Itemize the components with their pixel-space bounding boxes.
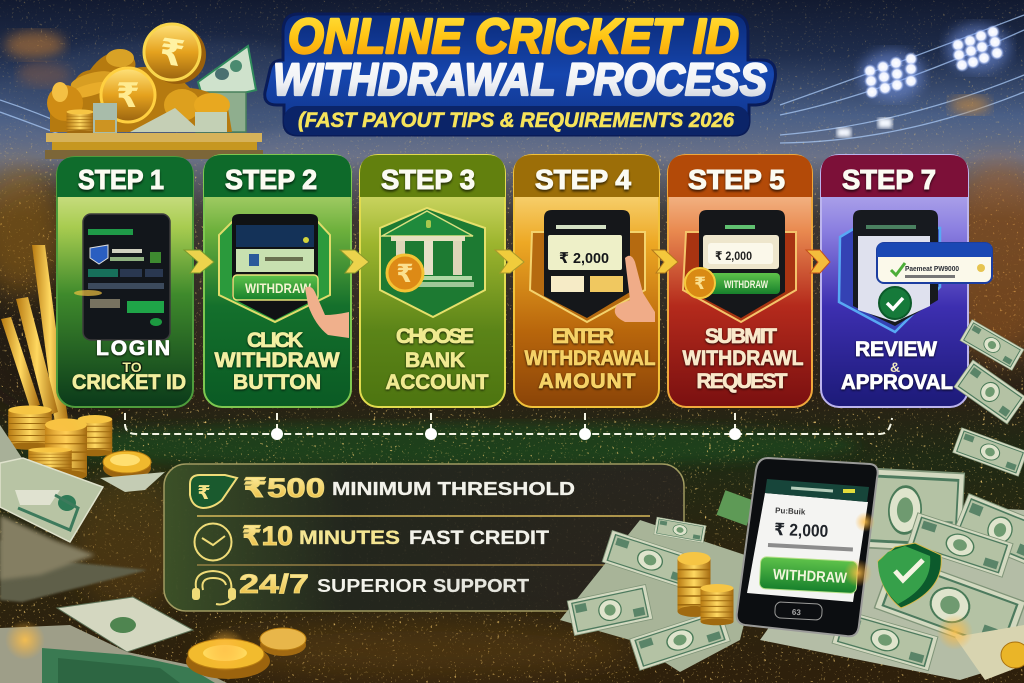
step 1 label: STEP 1 bbox=[78, 164, 164, 195]
row: fast credit: ₹10 bbox=[242, 521, 293, 551]
title line 2: WITHDRAWAL PROCESS bbox=[273, 54, 767, 105]
phone amount: ₹ 2,000 bbox=[774, 520, 828, 541]
step 2 hexagon with phone bbox=[219, 214, 330, 322]
row: superior support: SUPPORT bbox=[433, 576, 529, 596]
step 1 phone bbox=[74, 214, 170, 340]
step 4 caption bbox=[524, 325, 656, 393]
approval popup bbox=[877, 243, 992, 283]
row: superior support: 24/7 bbox=[239, 569, 309, 599]
step 1 caption: TO bbox=[122, 359, 142, 375]
step 4 hexagon with phone: ₹ 2,000 bbox=[559, 250, 609, 267]
phone withdraw button: WITHDRAW bbox=[773, 566, 848, 587]
step 5 hexagon with phone bbox=[683, 210, 796, 322]
step 7 caption: & bbox=[890, 359, 900, 375]
step 5 caption: WITHDRAWL bbox=[682, 347, 804, 370]
panel: key benefits bbox=[164, 464, 684, 611]
step 7 label: STEP 7 bbox=[842, 164, 936, 195]
row: minimum threshold: ₹500 bbox=[243, 473, 325, 503]
step 3 label: STEP 3 bbox=[381, 164, 475, 195]
title banner bbox=[265, 10, 775, 135]
panel: step 5 bbox=[668, 155, 812, 407]
row: superior support: SUPERIOR bbox=[317, 576, 427, 596]
cash pile: bottom right bbox=[560, 320, 1024, 680]
panel: step 2 bbox=[204, 155, 351, 407]
step 5 caption: REQUEST bbox=[696, 370, 788, 393]
icon: green security shield bbox=[878, 543, 941, 608]
step 5 hexagon with phone: ₹ 2,000 bbox=[715, 249, 752, 263]
step 7 caption: REVIEW bbox=[855, 338, 937, 361]
icon: golden cricket stumps bbox=[1, 245, 68, 424]
step 2 caption bbox=[214, 329, 340, 394]
panel: step 4 bbox=[514, 155, 659, 407]
arrow: step 5 to 7 bbox=[806, 250, 830, 273]
panel: step 1 bbox=[57, 157, 193, 407]
step 7 caption: APPROVAL bbox=[841, 371, 953, 394]
icon: rupee shield tick bbox=[190, 475, 237, 508]
icon: treasure pile of rupee coins and cash: ₹ bbox=[157, 30, 187, 75]
panel: step 7 bbox=[821, 155, 992, 407]
icon: coin stacks beside stumps bbox=[8, 406, 151, 480]
step 7 caption bbox=[841, 338, 953, 394]
step 5 caption bbox=[682, 325, 804, 393]
cash pile: bottom left bbox=[0, 425, 227, 683]
step 2 label: STEP 2 bbox=[225, 164, 317, 195]
approval popup: Paemeat PW9000 bbox=[905, 266, 959, 273]
step 1 caption: CRICKET ID bbox=[72, 371, 186, 394]
icon: pointing finger bbox=[615, 256, 655, 322]
row: fast credit: FAST CREDIT bbox=[409, 528, 549, 549]
icon: treasure pile of rupee coins and cash: ₹ bbox=[116, 77, 140, 115]
row: fast credit bbox=[242, 521, 549, 551]
phone: withdraw mockup bbox=[737, 458, 878, 636]
step 1 caption bbox=[72, 337, 186, 394]
panel: step 3 bbox=[360, 155, 505, 407]
step 3 caption: CHOOSE bbox=[396, 325, 474, 348]
phone withdraw button bbox=[759, 557, 858, 594]
step 5 label: STEP 5 bbox=[688, 164, 785, 195]
icon: bank with rupee coin bbox=[380, 208, 485, 317]
phone home pill: 63 bbox=[792, 608, 802, 617]
phone home pill bbox=[775, 602, 822, 620]
row: fast credit: MINUTES bbox=[299, 528, 400, 549]
step 4 caption: ENTER bbox=[552, 325, 614, 348]
phone heading text: Pu:Buik bbox=[775, 506, 806, 517]
icon: treasure pile of rupee coins and cash bbox=[45, 24, 263, 159]
subtitle: (FAST PAYOUT TIPS & REQUIREMENTS 2026 bbox=[298, 109, 734, 132]
icon: gold coins bottom bbox=[186, 628, 306, 679]
row: minimum threshold: MINIMUM THRESHOLD bbox=[332, 479, 575, 499]
icon: headset bbox=[193, 571, 235, 604]
arrow: step 2 to 3 bbox=[340, 250, 369, 273]
timeline: dashed connector with nodes bbox=[125, 413, 892, 440]
icon: pointing hand bbox=[305, 287, 349, 338]
step 2 caption: CLICK bbox=[247, 329, 303, 352]
step 7 hexagon with phone bbox=[839, 210, 940, 332]
icon: green check badge bbox=[879, 287, 911, 319]
step 2 caption: WITHDRAW bbox=[214, 349, 340, 372]
step 2 withdraw button bbox=[233, 275, 318, 300]
step 4 hexagon with phone bbox=[530, 210, 645, 322]
step 3 caption: BANK bbox=[405, 349, 465, 372]
step 2 caption: BUTTON bbox=[233, 371, 321, 394]
arrow: step 1 to 2 bbox=[184, 250, 214, 273]
step 4 label: STEP 4 bbox=[535, 164, 631, 195]
icon: rupee shield tick: ₹ bbox=[197, 483, 211, 504]
step 5 submit button bbox=[685, 268, 780, 298]
step 3 caption: ACCOUNT bbox=[386, 371, 489, 394]
step 5 caption: SUBMIT bbox=[705, 325, 777, 348]
step 5 submit button: ₹ bbox=[694, 274, 706, 293]
glow accents bbox=[5, 411, 973, 672]
step 2 withdraw button: WITHDRAW bbox=[245, 280, 312, 296]
icon: bank with rupee coin: ₹ bbox=[396, 260, 414, 288]
step 5 submit button: WITHDRAW bbox=[724, 279, 768, 291]
step 4 caption: AMOUNT bbox=[538, 370, 636, 393]
row: superior support bbox=[239, 569, 529, 599]
step 3 caption bbox=[386, 325, 489, 394]
stadium floodlights: left bank bbox=[860, 50, 924, 100]
icon: clock bbox=[194, 524, 232, 560]
arrow: step 3 to 4 bbox=[495, 250, 524, 273]
step 4 caption: WITHDRAWAL bbox=[524, 347, 656, 370]
stadium floodlights: right bank bbox=[946, 24, 1010, 72]
row: minimum threshold bbox=[243, 473, 575, 503]
icon: stacked gold coins bbox=[678, 552, 734, 625]
title line 1: ONLINE CRICKET ID bbox=[288, 10, 739, 64]
step 1 caption: LOGIN bbox=[96, 337, 170, 360]
arrow: step 4 to 5 bbox=[652, 250, 678, 273]
